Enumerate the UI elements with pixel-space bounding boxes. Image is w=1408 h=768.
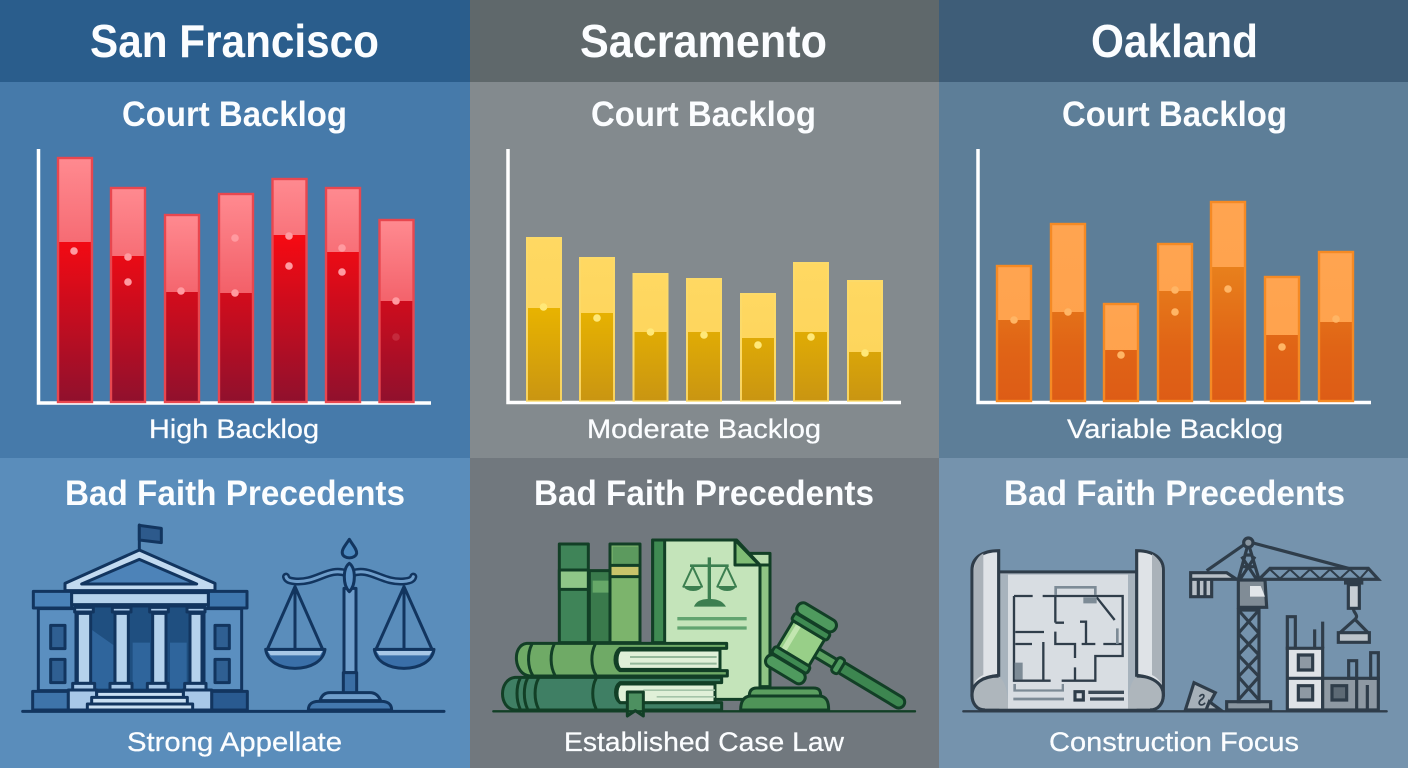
icon: tower crane xyxy=(1191,538,1378,710)
heading: Oakland: Oakland xyxy=(1091,15,1258,67)
icon: courthouse xyxy=(33,525,247,710)
icon: stacked books xyxy=(502,643,727,716)
heading: Bad Faith Precedents Oakland: Bad Faith Precedents xyxy=(1004,474,1345,513)
ground line xyxy=(493,708,915,715)
label: High Backlog: High Backlog xyxy=(149,414,319,444)
heading: San Francisco: San Francisco xyxy=(90,15,379,67)
label: Variable Backlog: Variable Backlog xyxy=(1067,414,1283,444)
heading: Court Backlog Oakland: Court Backlog xyxy=(1062,95,1287,134)
icon: blueprint and crane xyxy=(963,538,1387,711)
icon: balance scales xyxy=(0,520,434,710)
icon: law books, document and gavel xyxy=(493,540,923,737)
icon: legal document xyxy=(653,540,770,699)
heading: Sacramento: Sacramento xyxy=(580,15,827,67)
ground line xyxy=(23,707,444,716)
panel: San Francisco column xyxy=(0,0,470,768)
bar chart: San Francisco high backlog xyxy=(38,149,431,403)
label: Moderate Backlog: Moderate Backlog xyxy=(587,414,821,444)
icon: courthouse and scales xyxy=(0,520,444,711)
heading: Bad Faith Precedents Sacramento: Bad Faith Precedents xyxy=(534,474,874,513)
ground line xyxy=(963,708,1387,715)
heading: Court Backlog San Francisco: Court Backlog xyxy=(122,95,347,134)
icon: sack of material xyxy=(1185,683,1221,710)
icon: gavel xyxy=(741,601,923,737)
icon: blueprint xyxy=(972,551,1163,710)
heading: Bad Faith Precedents San Francisco: Bad Faith Precedents xyxy=(65,474,405,513)
heading: Court Backlog Sacramento: Court Backlog xyxy=(591,95,816,134)
icon: building under construction xyxy=(1287,617,1378,710)
bar chart: Oakland variable backlog xyxy=(978,149,1371,402)
panel: Sacramento column xyxy=(470,0,939,768)
panel: Oakland column xyxy=(939,0,1408,768)
label: Established Case Law: Established Case Law xyxy=(564,727,845,757)
label: Construction Focus: Construction Focus xyxy=(1049,727,1299,757)
icon: upright books xyxy=(559,544,640,643)
bar chart: Sacramento moderate backlog xyxy=(508,149,901,402)
label: Strong Appellate: Strong Appellate xyxy=(127,727,342,757)
